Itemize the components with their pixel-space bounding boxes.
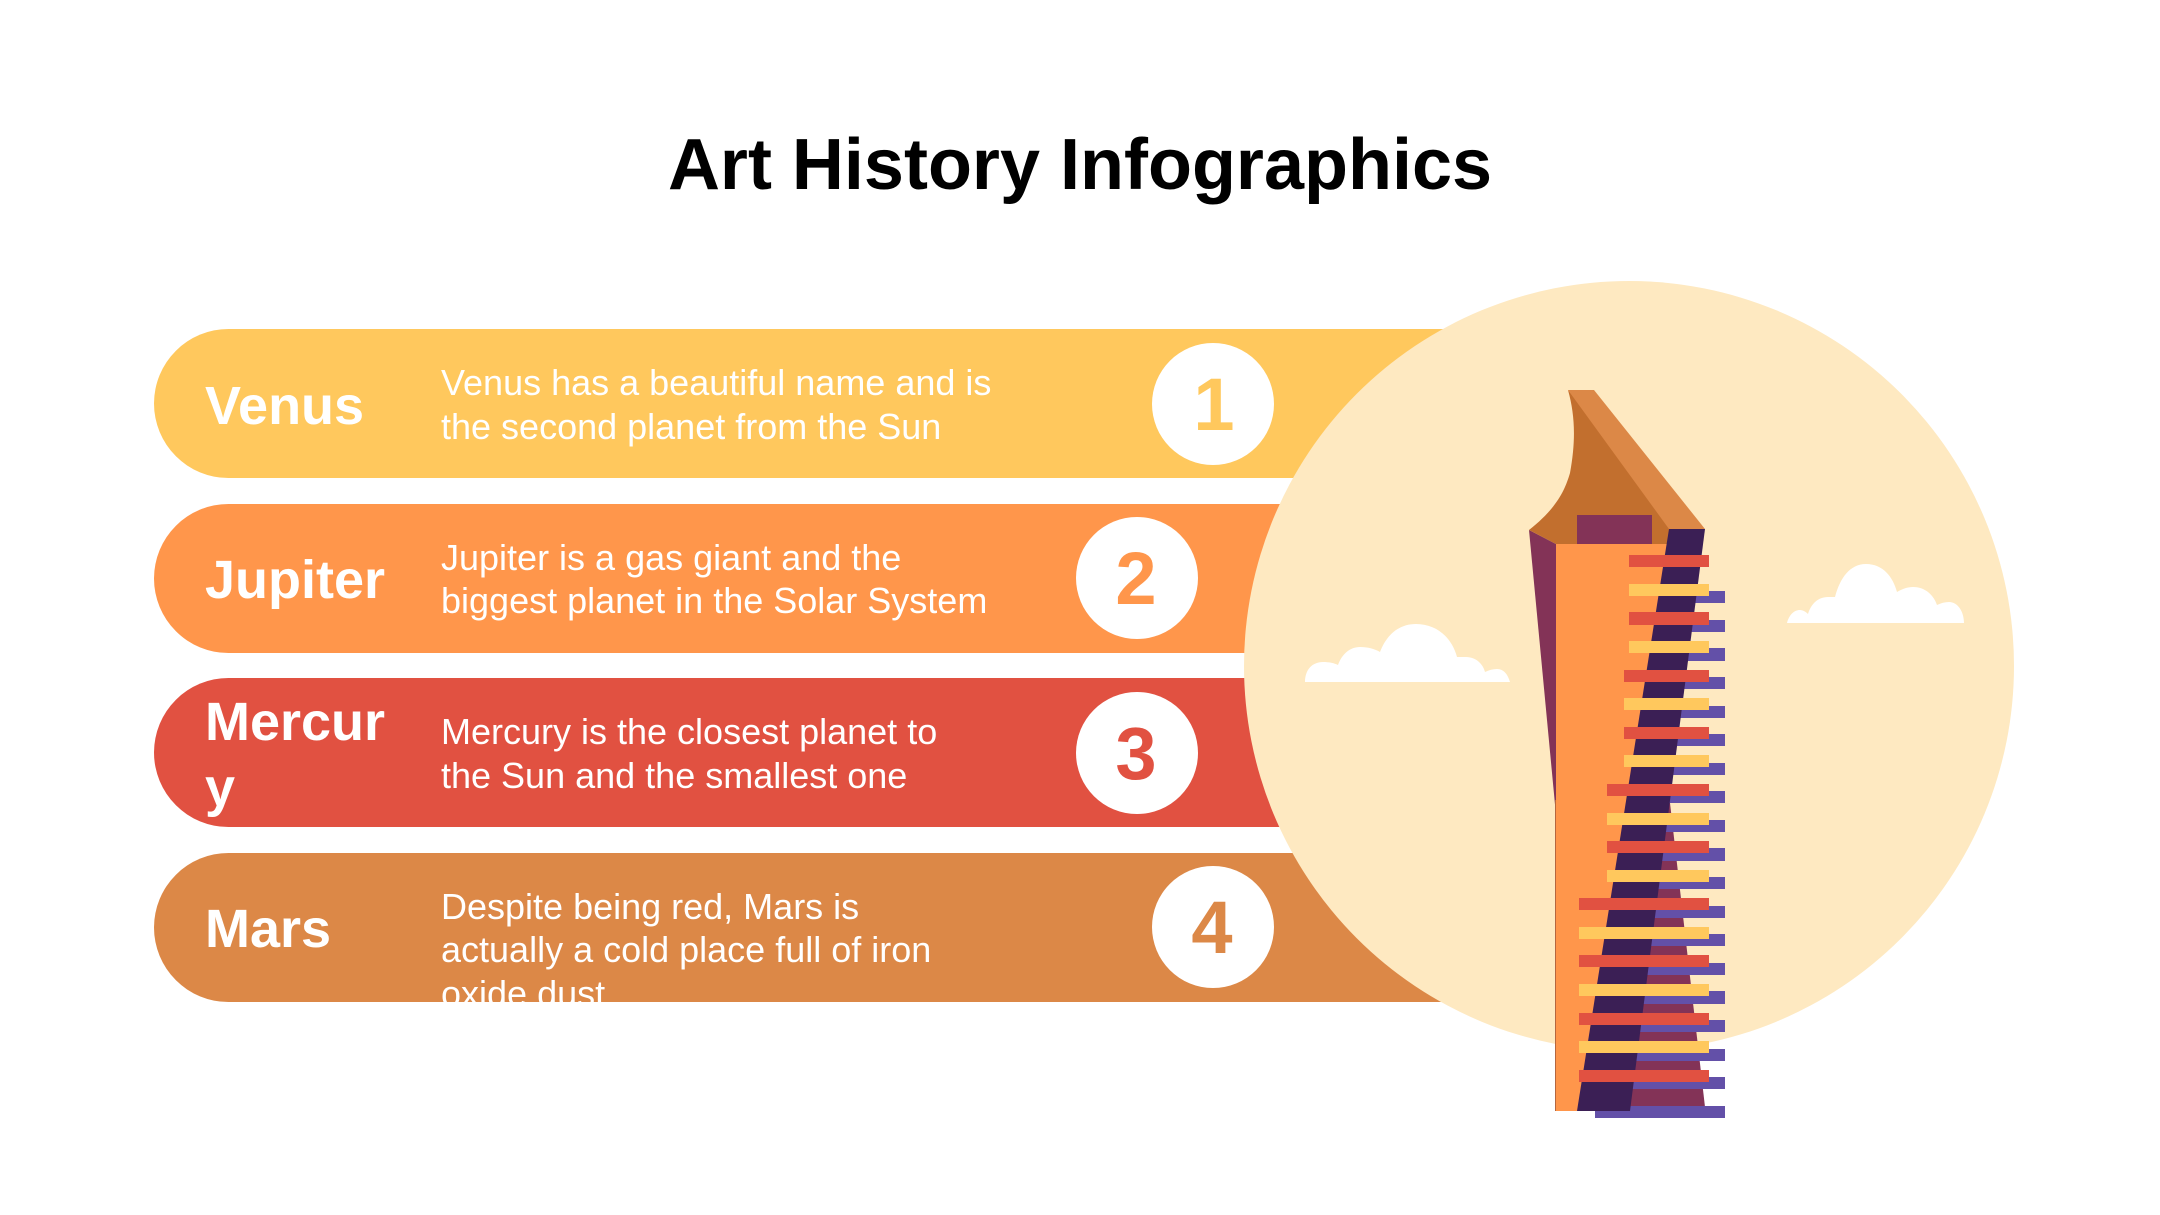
- number badge 4: 4: [1191, 886, 1233, 969]
- heading: Mercury: [205, 692, 385, 818]
- text: Mercury description: the Sun and the smallest one: [441, 754, 907, 796]
- heading: Jupiter: Jupiter: [205, 550, 385, 610]
- panel: Mercury row: [154, 678, 1554, 827]
- red and yellow step bars: [1579, 555, 1709, 1082]
- number badge 3: 3: [1115, 712, 1157, 794]
- panel: Mars row: [154, 852, 1554, 1002]
- text: Mars description: [441, 886, 931, 1002]
- number badge 3: [1076, 692, 1198, 814]
- panel: Jupiter row: [154, 504, 1554, 652]
- number badge 2: 2: [1115, 537, 1157, 620]
- heading: Venus: Venus: [205, 376, 364, 436]
- dark spine band: [1577, 529, 1705, 1111]
- heading: Mars: Mars: [205, 899, 331, 959]
- icon: right cloud: [1787, 564, 1964, 623]
- purple back bars: [1595, 591, 1725, 1118]
- tower orange face: [1556, 544, 1680, 1111]
- number badge 1: [1152, 342, 1274, 464]
- text: Mars description: actually a cold place full of iron: [441, 929, 931, 970]
- tower: [1529, 390, 1725, 1118]
- tower roof shaded face: [1529, 390, 1680, 544]
- text: Jupiter description: Jupiter is a gas giant and the: [441, 536, 901, 578]
- text: Venus description: [441, 362, 991, 446]
- number badge 2: [1076, 517, 1198, 639]
- panel: Venus row: [154, 329, 1554, 478]
- roof light face: [1568, 390, 1705, 529]
- text: Mars description: Despite being red, Mars is: [441, 886, 859, 926]
- title: Art History Infographics: [668, 125, 1492, 205]
- tower thin edge: [1555, 800, 1556, 1111]
- background circle: [1244, 281, 2014, 1051]
- text: Mercury description: Mercury is the closest planet to: [441, 711, 937, 752]
- roof window: [1577, 515, 1652, 544]
- text: Jupiter description: [441, 536, 987, 621]
- number badge 4: [1152, 866, 1274, 988]
- heading: Mercury: y: [205, 758, 235, 818]
- text: Mercury description: [441, 711, 937, 796]
- number badge 1: 1: [1193, 362, 1235, 446]
- text: Jupiter description: biggest planet in the Solar System: [441, 580, 987, 621]
- text: Venus description: Venus has a beautiful name and is: [441, 362, 991, 403]
- icon: left cloud: [1305, 624, 1510, 682]
- text: Venus description: the second planet from the Sun: [441, 406, 941, 446]
- burgundy back band: [1630, 803, 1705, 1107]
- heading: Mercury: Mercur: [205, 692, 385, 752]
- tower left side: [1529, 530, 1556, 815]
